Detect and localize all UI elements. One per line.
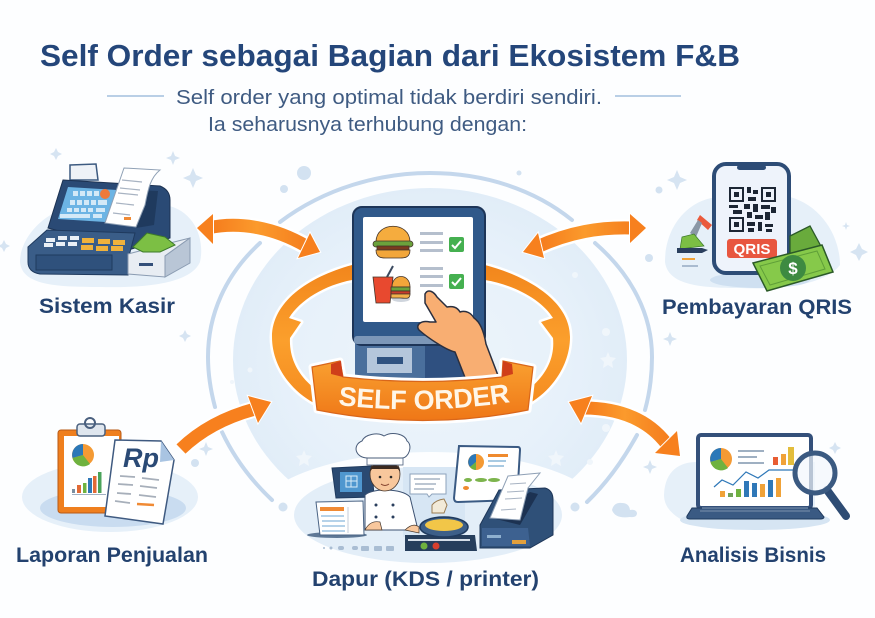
drink and burger icon xyxy=(373,266,410,303)
receipt printer top xyxy=(70,164,98,180)
laptop pie chart xyxy=(710,448,764,470)
order ticket xyxy=(307,501,367,538)
menu rows xyxy=(420,232,443,287)
banknote xyxy=(133,233,175,252)
node: sistem kasir xyxy=(20,164,201,287)
central hub background xyxy=(0,148,868,592)
cash drawer xyxy=(128,238,190,277)
label: laporan penjualan: Laporan Penjualan xyxy=(16,544,208,567)
laptop xyxy=(687,435,824,519)
subtitle: Self order yang optimal tidak berdiri sendiri. xyxy=(176,87,602,109)
orange orbit loop around kiosk xyxy=(272,265,570,403)
tablet chart xyxy=(454,446,520,502)
checkmarks xyxy=(449,237,464,289)
bar chart xyxy=(72,472,106,495)
self order ribbon: SELF ORDER xyxy=(339,384,510,410)
hand xyxy=(418,291,499,380)
rupiah document xyxy=(105,440,174,524)
arrow: sistem kasir to self order xyxy=(197,214,320,258)
node: pembayaran qris xyxy=(665,164,840,291)
self order ribbon xyxy=(308,358,536,424)
status dots xyxy=(323,546,394,551)
pie chart xyxy=(72,444,94,466)
label: dapur: Dapur (KDS / printer) xyxy=(312,568,539,591)
laptop bar and line chart xyxy=(714,447,795,497)
magnifier xyxy=(795,453,846,516)
cash register xyxy=(28,180,170,275)
qris tag xyxy=(727,239,777,258)
subtitle xyxy=(107,87,681,136)
qr code xyxy=(729,187,776,232)
node: dapur xyxy=(294,434,562,563)
speech bubble xyxy=(410,474,446,497)
rupiah document: Rp xyxy=(123,443,159,473)
label: analisis bisnis: Analisis Bisnis xyxy=(680,544,826,567)
subtitle: Ia seharusnya terhubung dengan: xyxy=(208,114,527,136)
burger icon xyxy=(373,226,413,258)
chef xyxy=(356,434,419,533)
label: sistem kasir: Sistem Kasir xyxy=(39,295,175,318)
title: Self Order sebagai Bagian dari Ekosistem F&B xyxy=(40,38,740,73)
paper receipt xyxy=(105,168,160,227)
kiosk tablet xyxy=(353,207,499,388)
small payment terminal xyxy=(677,215,712,267)
kitchen monitor xyxy=(332,466,374,498)
banknotes xyxy=(753,226,833,291)
kitchen printer xyxy=(480,473,553,548)
banknotes: $ xyxy=(788,259,798,278)
node: analisis bisnis xyxy=(664,435,846,530)
arrow: qris to self order xyxy=(523,214,646,258)
kiosk stand xyxy=(355,340,483,388)
label: pembayaran qris: Pembayaran QRIS xyxy=(662,296,852,319)
phone xyxy=(714,164,789,273)
clipboard xyxy=(58,418,121,513)
arrow: analisis to self order xyxy=(569,396,680,456)
arrow: laporan to self order xyxy=(181,396,271,449)
stove and pan xyxy=(405,499,477,551)
qris tag: QRIS xyxy=(734,241,770,258)
node: laporan penjualan xyxy=(22,418,198,532)
